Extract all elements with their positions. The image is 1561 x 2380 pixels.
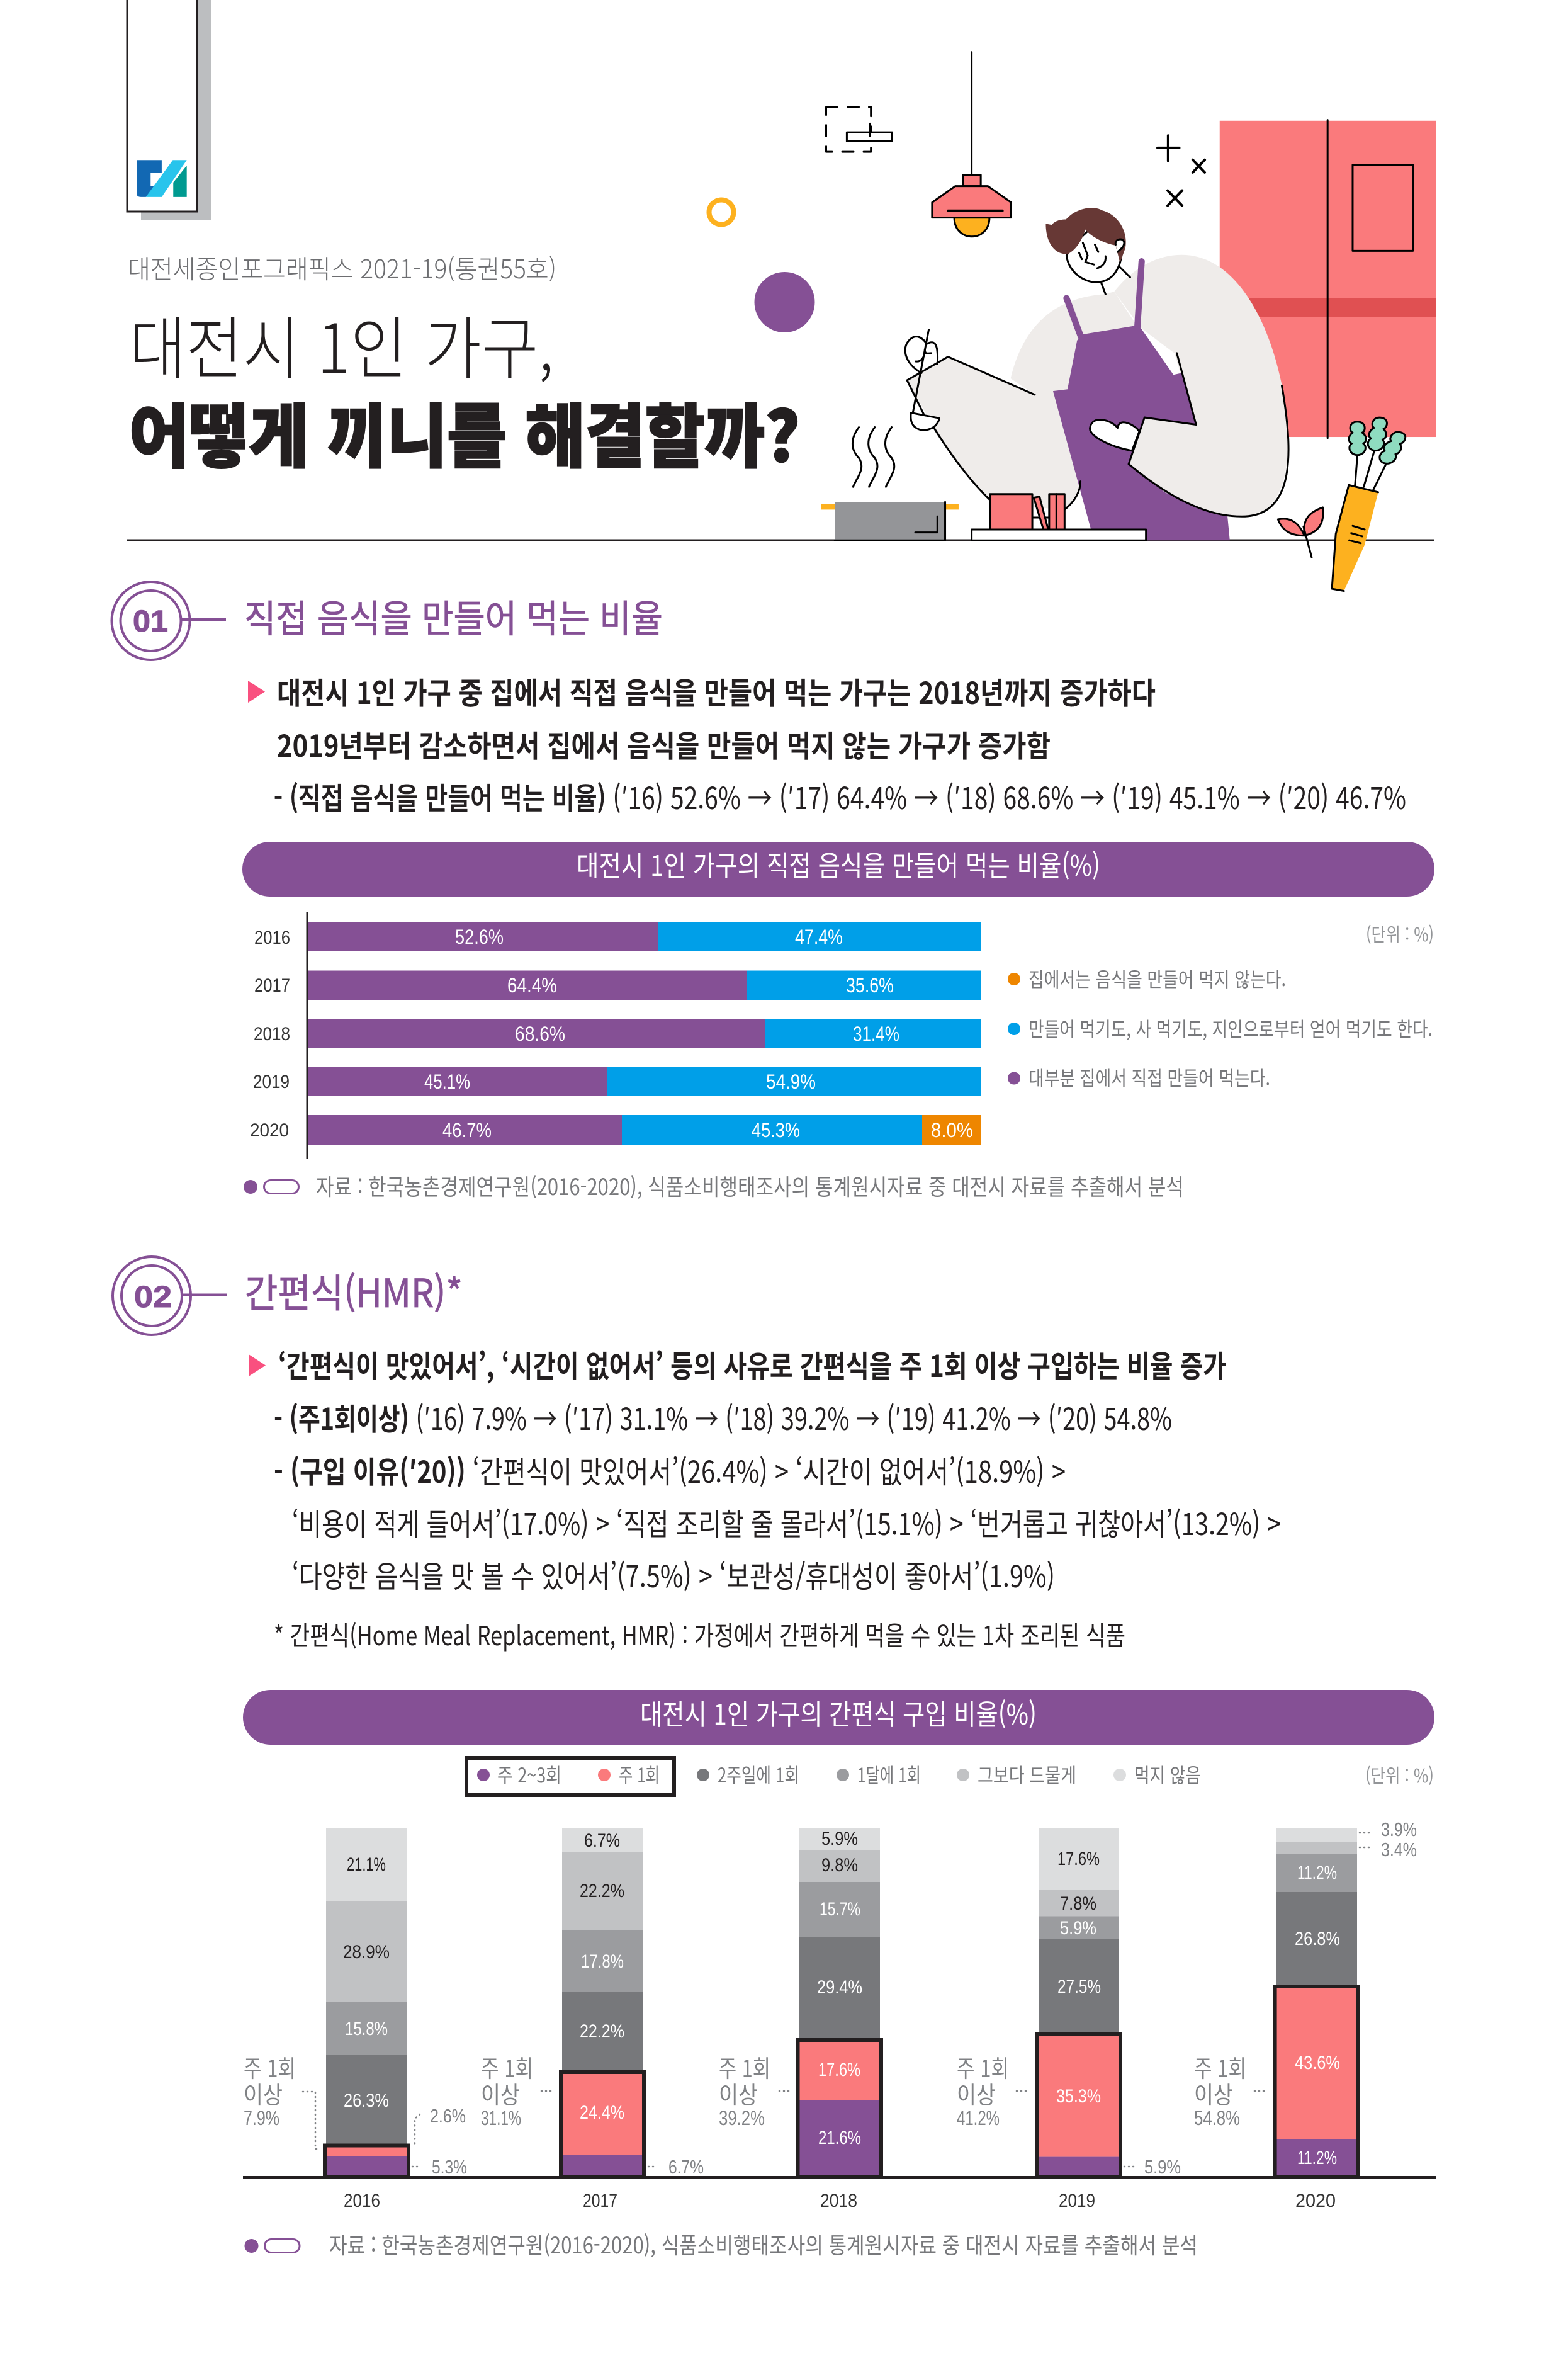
chart 2 legend <box>466 1758 1201 1795</box>
bar row 2016: 2016 <box>254 927 290 948</box>
column 2016: 26.3% <box>344 2090 389 2111</box>
column 2016: 주 1회 <box>244 2049 296 2084</box>
column 2016: 21.1% <box>347 1854 386 1875</box>
section 01 summary text: 대전시 1인 가구 중 집에서 직접 음식을 만들어 먹는 가구는 2018년까지 증가하다 <box>277 669 1156 713</box>
column 2018: 이상 <box>719 2076 758 2111</box>
bar row 2017: 64.4% <box>507 974 557 997</box>
column 2016: 28.9% <box>343 1942 390 1963</box>
subtitle: 대전세종인포그래픽스 2021-19(통권55호) <box>128 248 556 286</box>
section 02 heading: 간편식(HMR)* <box>245 1262 463 1318</box>
column 2019: 5.9% <box>1060 1918 1096 1939</box>
section 02 summary text: - (구입 이유(′20)) ‘간편식이 맛있어서’(26.4%) > ‘시간이 없어서’(18.9%) > <box>274 1448 1066 1492</box>
chart 1 title pill <box>242 842 1434 897</box>
chart 1 title pill: 대전시 1인 가구의 직접 음식을 만들어 먹는 비율(%) <box>577 843 1100 884</box>
column 2019: 5.9% <box>1144 2156 1181 2178</box>
chart 2 title pill: 대전시 1인 가구의 간편식 구입 비율(%) <box>640 1692 1037 1733</box>
bar row 2016: 52.6% <box>455 926 504 948</box>
column 2019: 주 1회 <box>957 2049 1009 2084</box>
column 2018: 주 1회 <box>719 2049 770 2084</box>
section 01 summary text <box>248 669 1406 818</box>
column 2017: 이상 <box>481 2076 520 2111</box>
bar row 2020: 45.3% <box>752 1119 800 1142</box>
chart 1 legend <box>1008 964 1433 1092</box>
bar row 2017: 35.6% <box>846 974 894 997</box>
column 2016 <box>244 1828 467 2211</box>
section 02 badge <box>113 1257 227 1335</box>
column 2019: 41.2% <box>957 2107 1000 2129</box>
column 2020: 주 1회 <box>1194 2049 1246 2084</box>
section 01 summary text: - (직접 음식을 만들어 먹는 비율) (′16) 52.6% → (′17) 64.4% → (′18) 68.6% → (′19) 45.1% → (′20) 46.7% <box>274 774 1406 818</box>
column 2016: 7.9% <box>244 2107 279 2129</box>
icon: purple dot <box>754 272 814 332</box>
section 02 summary text: ‘간편식이 맛있어서’, ‘시간이 없어서’ 등의 사유로 간편식을 주 1회 이상 구입하는 비율 증가 <box>278 1342 1226 1386</box>
icon: leaf sprig <box>1278 507 1323 557</box>
icon: utensils and cutting board <box>972 494 1146 540</box>
column 2020: 43.6% <box>1295 2053 1340 2073</box>
bar row 2018: 2018 <box>254 1024 290 1045</box>
column 2020: 3.4% <box>1381 1839 1417 1861</box>
column 2018: 2018 <box>820 2190 857 2211</box>
chart 2 title pill <box>243 1690 1434 1745</box>
chart 2 source note: 자료 : 한국농촌경제연구원(2016-2020), 식품소비행태조사의 통계원시자료 중 대전시 자료를 추출해서 분석 <box>329 2228 1198 2260</box>
chart 2 legend: 2주일에 1회 <box>718 1760 799 1789</box>
column 2016: 5.3% <box>432 2156 467 2178</box>
cook: head <box>1045 208 1130 294</box>
cook: ladle and hand <box>905 330 939 430</box>
bar row 2016 <box>254 922 981 951</box>
bar row 2018 <box>254 1019 981 1048</box>
logo bookmark tab <box>127 0 211 220</box>
section 02 summary text <box>249 1342 1281 1653</box>
column 2019: 35.3% <box>1056 2086 1101 2107</box>
column 2018: 9.8% <box>821 1855 858 1876</box>
column 2017: 22.2% <box>580 2021 624 2042</box>
chart 1 unit note: (단위 : %) <box>1366 919 1434 947</box>
chart 1 legend: 만들어 먹기도, 사 먹기도, 지인으로부터 얻어 먹기도 한다. <box>1028 1014 1433 1043</box>
bar row 2020 <box>250 1115 981 1145</box>
column 2018: 17.6% <box>818 2060 860 2080</box>
chart 1 source note: 자료 : 한국농촌경제연구원(2016-2020), 식품소비행태조사의 통계원시자료 중 대전시 자료를 추출해서 분석 <box>316 1169 1184 1202</box>
icon: carrot <box>1332 417 1409 591</box>
bar row 2019: 54.9% <box>766 1070 816 1093</box>
chart 2 legend: 주 2~3회 <box>497 1760 561 1789</box>
chart 2: stacked column chart <box>243 1818 1436 2211</box>
icon: logo mark <box>137 160 187 197</box>
column 2020: 11.2% <box>1297 2148 1337 2168</box>
chart 1 legend: 집에서는 음식을 만들어 먹지 않는다. <box>1028 964 1286 993</box>
column 2020: 2020 <box>1295 2190 1336 2211</box>
column 2016: 2016 <box>344 2190 380 2211</box>
column 2016: 2.6% <box>430 2105 466 2127</box>
column 2017: 2017 <box>583 2190 617 2211</box>
bar row 2020: 46.7% <box>442 1119 492 1142</box>
column 2017: 주 1회 <box>481 2049 533 2084</box>
column 2020: 11.2% <box>1297 1862 1337 1883</box>
bar row 2016: 47.4% <box>795 926 843 948</box>
title line 1: 대전시 1인 가구, <box>129 295 554 393</box>
column 2019: 2019 <box>1059 2190 1095 2211</box>
column 2018: 21.6% <box>818 2128 861 2148</box>
column 2017: 24.4% <box>580 2102 624 2123</box>
chart 2 legend: 1달에 1회 <box>857 1760 921 1789</box>
column 2017: 17.8% <box>581 1951 624 1972</box>
chart 1: stacked horizontal bars <box>250 912 981 1159</box>
bar row 2018: 31.4% <box>853 1023 899 1045</box>
icon: fridge <box>1220 120 1436 438</box>
bar row 2018: 68.6% <box>515 1023 565 1045</box>
column 2020: 이상 <box>1194 2076 1233 2111</box>
column 2020: 26.8% <box>1295 1929 1340 1949</box>
column 2017: 6.7% <box>584 1830 620 1851</box>
column 2017 <box>481 1828 704 2211</box>
section 02 summary text: * 간편식(Home Meal Replacement, HMR) : 가정에서 간편하게 먹을 수 있는 1차 조리된 식품 <box>274 1615 1125 1653</box>
icon: pink triangle bullet <box>248 681 265 703</box>
header divider and kitchen illustration <box>127 52 1436 591</box>
bar row 2019: 45.1% <box>424 1070 470 1093</box>
cook: body and arms <box>907 255 1288 540</box>
bar row 2019 <box>253 1067 981 1096</box>
column 2019: 7.8% <box>1060 1893 1096 1914</box>
column 2019: 17.6% <box>1057 1849 1100 1869</box>
icon: pendant lamp <box>932 52 1011 237</box>
column 2018 <box>719 1828 881 2211</box>
column 2018: 39.2% <box>719 2107 765 2129</box>
section 01 badge: 01 <box>133 605 168 638</box>
title line 2: 어떻게 끼니를 해결할까? <box>129 381 800 482</box>
section 02 summary text: ‘다양한 음식을 맛 볼 수 있어서’(7.5%) > ‘보관성/휴대성이 좋아서’(1.9%) <box>292 1552 1055 1596</box>
section 01 summary text: 2019년부터 감소하면서 집에서 음식을 만들어 먹지 않는 가구가 증가함 <box>277 722 1051 766</box>
icon: dashed frame <box>826 107 892 152</box>
section 01 heading: 직접 음식을 만들어 먹는 비율 <box>244 589 663 643</box>
bar row 2019: 2019 <box>253 1072 290 1092</box>
icon: pink triangle bullet <box>249 1354 266 1376</box>
icon: orange ring <box>709 200 734 224</box>
column 2017: 22.2% <box>580 1881 624 1901</box>
section 02 badge: 02 <box>134 1281 172 1314</box>
chart 2 legend: 주 1회 <box>619 1760 660 1789</box>
column 2020 <box>1194 1818 1417 2211</box>
chart 2 unit note: (단위 : %) <box>1365 1760 1434 1788</box>
bar row 2017: 2017 <box>254 975 290 996</box>
section 01 badge <box>112 582 226 660</box>
icon: steaming pot <box>821 428 959 540</box>
column 2019 <box>957 1828 1181 2211</box>
bar row 2017 <box>254 971 981 1000</box>
column 2019: 이상 <box>957 2076 996 2111</box>
column 2016: 이상 <box>244 2076 283 2111</box>
column 2017: 31.1% <box>481 2107 521 2129</box>
chart 1 legend: 대부분 집에서 직접 만들어 먹는다. <box>1028 1063 1270 1092</box>
bar row 2020: 2020 <box>250 1120 289 1141</box>
column 2018: 15.7% <box>820 1899 860 1920</box>
chart 2 legend: 그보다 드물게 <box>978 1760 1076 1789</box>
column 2017: 6.7% <box>668 2156 704 2178</box>
column 2018: 5.9% <box>821 1828 858 1849</box>
column 2020: 3.9% <box>1381 1818 1417 1840</box>
column 2018: 29.4% <box>817 1977 862 1998</box>
column 2019: 27.5% <box>1057 1976 1101 1997</box>
icon: sparkle marks <box>1158 135 1205 206</box>
bar row 2020: 8.0% <box>931 1119 973 1142</box>
chart 2 legend: 먹지 않음 <box>1134 1760 1201 1789</box>
section 02 summary text: - (주1회이상) (′16) 7.9% → (′17) 31.1% → (′18) 39.2% → (′19) 41.2% → (′20) 54.8% <box>274 1395 1172 1439</box>
section 02 summary text: ‘비용이 적게 들어서’(17.0%) > ‘직접 조리할 줄 몰라서’(15.1%) > ‘번거롭고 귀찮아서’(13.2%) > <box>292 1500 1281 1544</box>
column 2016: 15.8% <box>345 2019 388 2039</box>
column 2020: 54.8% <box>1194 2107 1240 2129</box>
